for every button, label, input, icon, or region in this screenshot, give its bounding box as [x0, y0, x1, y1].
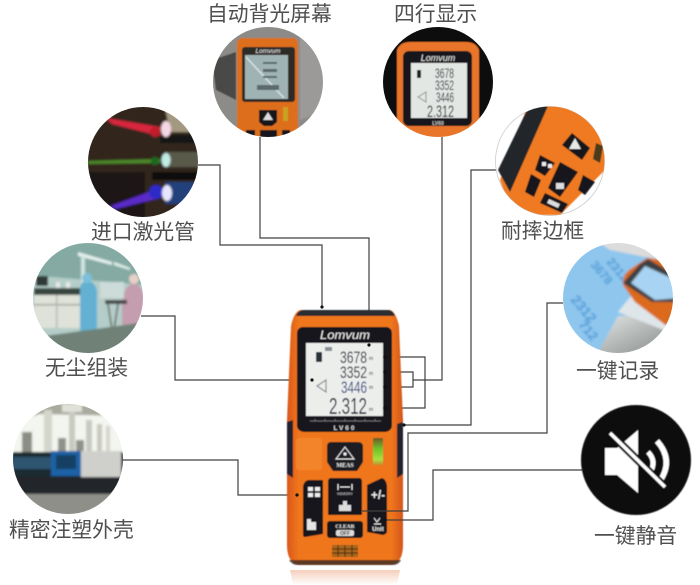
brand logo: Lomvum [320, 328, 370, 342]
triangle indicator [317, 380, 326, 392]
photo [88, 107, 198, 217]
feature: imported laser tube [88, 107, 198, 241]
photo [383, 27, 493, 137]
line: laser tube [198, 165, 322, 306]
photo: 2.312 [427, 102, 454, 121]
connector dots [295, 305, 406, 522]
LCD screen [306, 343, 383, 416]
photo [563, 243, 673, 353]
photo: 3678 [435, 65, 454, 81]
device: laser rangefinder: MEAS [336, 463, 354, 469]
label: 耐摔边框 [501, 220, 584, 243]
photo: 712 [576, 317, 601, 344]
feature: one-key record [563, 243, 673, 380]
feature: shock-proof frame [496, 102, 610, 243]
feature: precision moulded shell [9, 400, 134, 542]
photo: 3446 [436, 89, 454, 105]
device: laser rangefinder: OFF [340, 531, 350, 537]
photo [33, 243, 143, 353]
photo: LV60 [432, 121, 444, 127]
photo [496, 106, 604, 216]
line: one-key record [362, 303, 563, 511]
centre button [328, 478, 362, 515]
battery icon [316, 352, 322, 362]
side grips [287, 420, 293, 478]
screen bezel [297, 327, 392, 432]
label: 四行显示 [394, 3, 477, 26]
line: precision moulded shell [123, 460, 297, 495]
reading rows: 3678 [340, 348, 367, 367]
reading rows [329, 348, 373, 419]
bottom level [332, 545, 358, 557]
top dark edge [296, 310, 395, 316]
line: auto backlight [260, 137, 369, 344]
line: dust-free assembly [141, 316, 312, 380]
feature: one-key mute [581, 405, 691, 548]
feature: four-line display [383, 3, 493, 137]
MEAS button [327, 442, 363, 471]
photo: 3352 [435, 77, 454, 93]
right button [367, 478, 387, 535]
reading rows: 2.312 [329, 393, 367, 419]
photo: 3678 [588, 258, 616, 288]
photo [13, 404, 123, 514]
device: laser rangefinder: CLEAR [335, 524, 356, 530]
device: laser rangefinder: MEMORY [337, 492, 354, 496]
left button [303, 480, 323, 537]
device body [287, 310, 403, 565]
photo: 2312 [604, 255, 632, 285]
label: 无尘组装 [45, 357, 128, 380]
label: 自动背光屏幕 [207, 3, 332, 26]
label: 一键静音 [594, 525, 677, 548]
photo: Lomvum [256, 48, 281, 55]
reading rows: m [369, 371, 373, 377]
reading rows: 3446 [341, 378, 367, 397]
model label: LV60 [334, 425, 355, 432]
line: shock-proof frame [404, 170, 497, 425]
device: laser rangefinder: Unit [372, 527, 384, 533]
photo: 2312 [568, 292, 600, 326]
line: display bracket [385, 357, 425, 408]
bottom edge [289, 560, 401, 565]
clear off button [327, 521, 363, 538]
emboss panel [296, 438, 322, 470]
device: laser rangefinder: +/- [371, 488, 385, 502]
label: 一键记录 [576, 360, 659, 383]
line: one-key mute [385, 470, 582, 520]
label: 精密注塑外壳 [9, 519, 134, 542]
icon: muted speaker [581, 405, 691, 515]
reading rows: m [369, 385, 373, 391]
line: four-line display [413, 137, 442, 380]
bubble level [373, 438, 383, 465]
photo: Lomvum [421, 53, 456, 63]
reading rows: m [369, 356, 373, 362]
device: laser rangefinder [287, 310, 403, 585]
ruler [310, 419, 381, 421]
device reflection [290, 570, 400, 585]
feature: dust-free assembly [30, 240, 146, 380]
connector lines over device [295, 170, 582, 522]
feature: auto backlight screen [207, 3, 332, 142]
label: 进口激光管 [91, 221, 195, 244]
connector lines [123, 137, 442, 495]
reading rows: 3352 [340, 363, 367, 382]
reading rows: m [369, 407, 373, 413]
